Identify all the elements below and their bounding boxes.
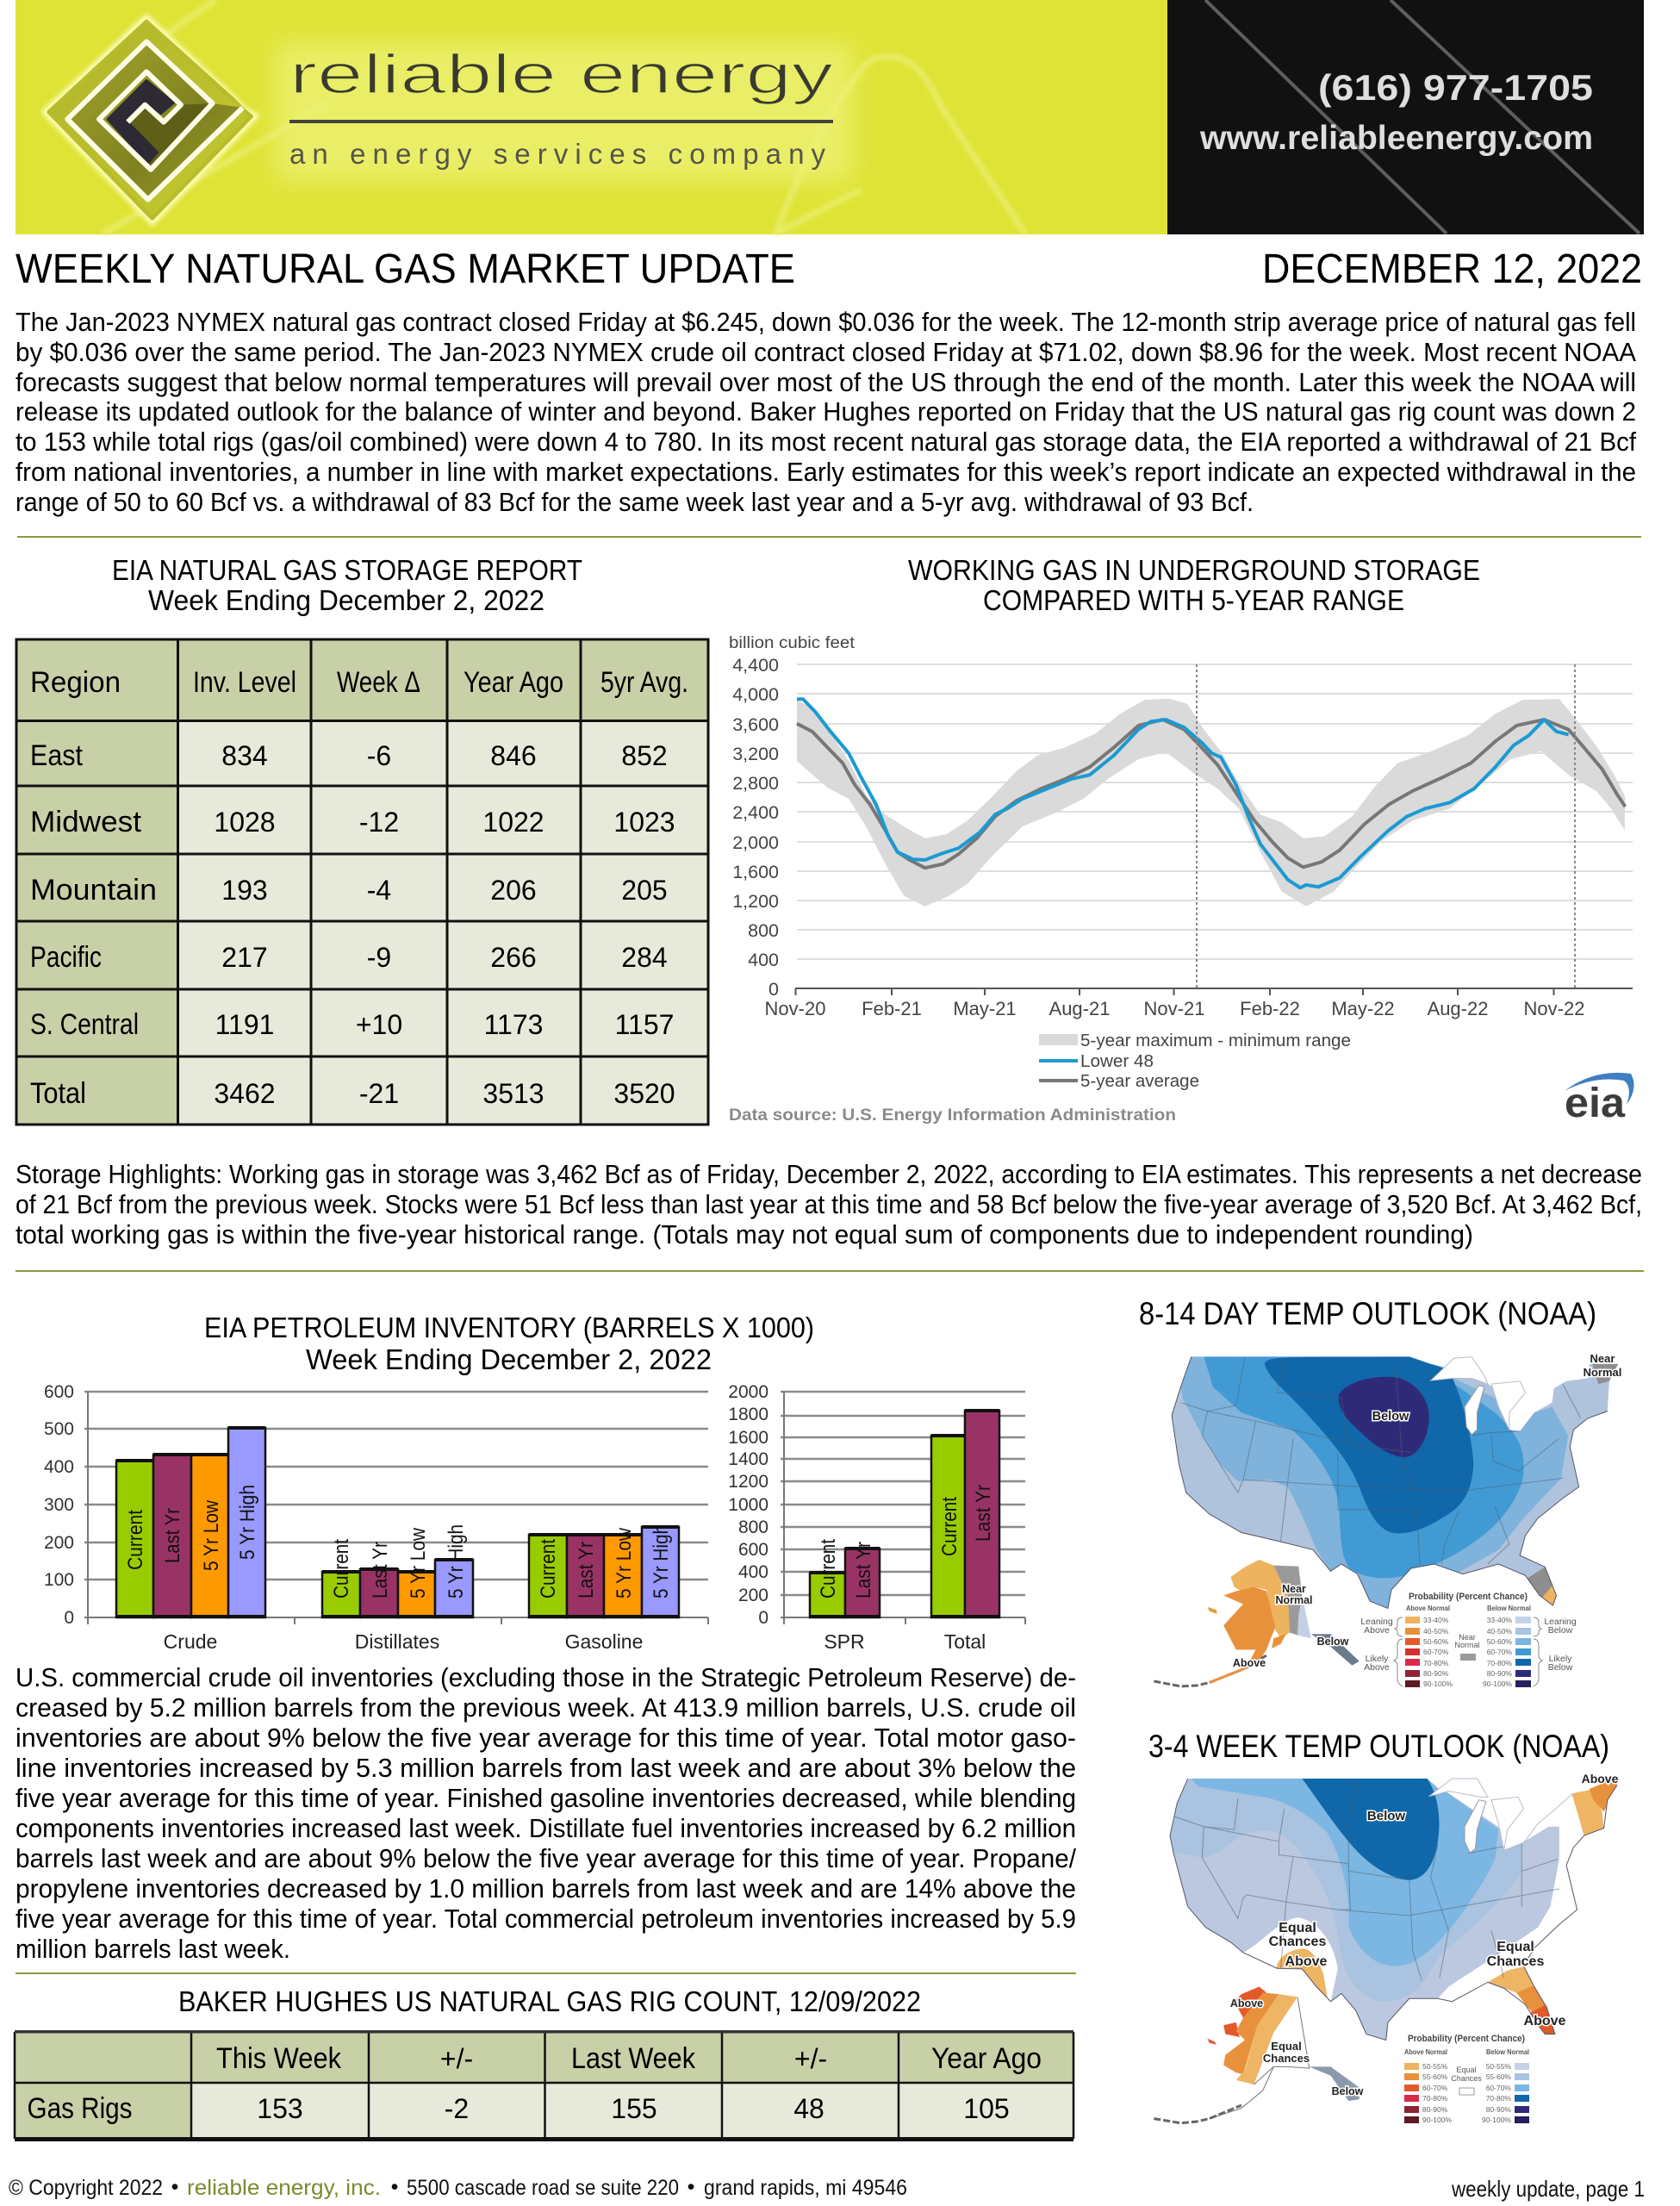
bar chart: crude, distillates, gasoline: 100 <box>44 1570 74 1590</box>
probability legend: Below <box>1548 1625 1573 1636</box>
footer: copyright and address: reliable energy, inc. <box>187 2176 381 2200</box>
table: natural gas storage by region: 266 <box>490 942 537 973</box>
contact panel: (616) 977-1705 <box>1318 67 1593 108</box>
map labels: Normal <box>1584 1366 1621 1379</box>
US contiguous probability bands <box>1172 1356 1618 1610</box>
table: gas rig count: +/- <box>440 2043 473 2074</box>
bar chart: crude, distillates, gasoline: 5 Yr High <box>445 1524 468 1598</box>
market summary paragraph: by $0.036 over the same period. The Jan-2023 NYMEX crude oil contract closed Friday at $71.02, down $8.96 for the week. Most recent NOAA <box>16 338 1637 367</box>
bar chart: crude, distillates, gasoline: Last Yr <box>161 1508 184 1563</box>
table: natural gas storage by region: Midwest <box>30 806 142 838</box>
line chart: working gas in underground storage: 1,200 <box>732 891 779 912</box>
bar chart: SPR and total: 1800 <box>728 1405 768 1424</box>
line chart: working gas in underground storage: 4,000 <box>732 684 779 705</box>
market summary paragraph: from national inventories, a number in line with market expectations. Early estimates for this week’s report indicate an expected withdrawal in the <box>16 458 1636 487</box>
probability legend: Above <box>1364 1625 1390 1636</box>
map labels: Below <box>1372 1410 1409 1424</box>
map labels: Normal <box>1275 1594 1313 1606</box>
line chart: working gas in underground storage: 2,800 <box>732 773 779 794</box>
bar chart: crude, distillates, gasoline: 5 Yr High <box>236 1485 259 1560</box>
bar chart: SPR and total: 1000 <box>728 1495 768 1515</box>
probability legend: 80-90% <box>1423 1669 1449 1678</box>
probability legend: 60-70% <box>1487 1648 1512 1656</box>
line chart: working gas in underground storage: 400 <box>748 950 779 970</box>
page date: DECEMBER 12, 2022 <box>1262 246 1642 292</box>
storage highlights text: total working gas is within the five-year historical range. (Totals may not equal sum of components due to independent rounding) <box>16 1220 1473 1249</box>
line chart: working gas in underground storage: 800 <box>748 920 779 941</box>
line chart: working gas in underground storage: 1,600 <box>732 862 779 882</box>
probability legend: 90-100% <box>1422 2116 1452 2124</box>
bar chart: SPR and total: 200 <box>738 1586 768 1605</box>
line chart: working gas in underground storage: Feb-22 <box>1240 998 1300 1019</box>
bar chart: SPR and total: 400 <box>738 1562 768 1582</box>
banner background <box>16 0 1167 234</box>
map labels: Below <box>1317 1636 1349 1648</box>
bar chart: SPR and total: 600 <box>738 1540 768 1560</box>
Alaska inset <box>1154 1987 1360 2123</box>
line chart: working gas in underground storage: Aug-22 <box>1428 998 1488 1019</box>
probability legend: 80-90% <box>1422 2105 1448 2114</box>
probability legend: 70-80% <box>1423 1659 1449 1667</box>
bar chart: SPR and total: Current <box>817 1539 840 1598</box>
heading: 8-14 day outlook: 8-14 DAY TEMP OUTLOOK (NOAA) <box>1139 1296 1596 1331</box>
contact panel: www.reliableenergy.com <box>1199 120 1593 157</box>
bar chart: SPR and total: 0 <box>758 1608 768 1628</box>
probability legend: Leaning <box>1544 1617 1577 1627</box>
table: gas rig count: -2 <box>445 2093 469 2124</box>
table: natural gas storage by region: Total <box>30 1077 86 1110</box>
heading: petroleum inventory <box>204 1312 814 1375</box>
probability legend: 40-50% <box>1423 1627 1449 1636</box>
table: natural gas storage by region: 217 <box>221 942 268 973</box>
probability legend: Above Normal <box>1404 2047 1447 2056</box>
bar chart: crude, distillates, gasoline: 5 Yr Low <box>613 1527 636 1598</box>
heading: working gas chart: WORKING GAS IN UNDERGROUND STORAGE <box>908 554 1480 586</box>
market summary paragraph <box>16 308 1637 517</box>
map labels: Equal <box>1496 1940 1534 1954</box>
probability legend: Below <box>1548 1662 1573 1673</box>
bar chart: SPR and total: 2000 <box>728 1382 768 1402</box>
table: natural gas storage by region: 193 <box>221 875 268 906</box>
table: natural gas storage by region: Inv. Level <box>193 666 296 699</box>
table: natural gas storage by region: S. Central <box>30 1008 139 1041</box>
bar chart: crude, distillates, gasoline: 5 Yr Low <box>407 1527 430 1598</box>
page title: WEEKLY NATURAL GAS MARKET UPDATE <box>16 246 795 292</box>
map labels: Above <box>1230 1997 1263 2010</box>
petroleum commentary text: line inventories increased by 5.3 million barrels from last week and are about 3% below the <box>16 1754 1076 1783</box>
probability legend: Equal <box>1456 2066 1477 2074</box>
table: natural gas storage by region: Week Δ <box>337 666 420 699</box>
bar chart: crude, distillates, gasoline: Crude <box>164 1630 217 1653</box>
probability legend: 80-90% <box>1486 2105 1511 2114</box>
table: natural gas storage by region: 1023 <box>613 807 675 838</box>
footer: copyright and address: © Copyright 2022 <box>9 2176 163 2200</box>
petroleum commentary text: creased by 5.2 million barrels from the previous week. At 413.9 million barrels, U.S. crude oil <box>16 1693 1076 1723</box>
line chart: working gas in underground storage: Feb-21 <box>862 998 922 1019</box>
line chart: working gas in underground storage: May-21 <box>953 998 1017 1019</box>
probability legend: 55-60% <box>1486 2072 1511 2081</box>
table: gas rig count: 155 <box>611 2093 657 2124</box>
bar chart: crude, distillates, gasoline: Current <box>124 1510 147 1570</box>
map labels: Below <box>1367 1809 1405 1823</box>
table: gas rig count <box>15 2030 1073 2141</box>
bar chart: crude, distillates, gasoline: Last Yr <box>369 1542 392 1598</box>
company name: reliable energy <box>289 43 833 105</box>
table: gas rig count: This Week <box>216 2042 342 2075</box>
line chart: working gas in underground storage: 3,200 <box>732 744 779 764</box>
table: natural gas storage by region: -9 <box>367 942 391 973</box>
footer: copyright and address: 5500 cascade road se suite 220 <box>407 2176 679 2200</box>
5-year range band and curves <box>797 699 1625 907</box>
probability legend: Below Normal <box>1487 1604 1531 1612</box>
table: natural gas storage by region: 1173 <box>484 1009 543 1040</box>
probability legend: Near <box>1459 1633 1476 1642</box>
bar chart: SPR and total: 800 <box>738 1517 768 1537</box>
table: natural gas storage by region: 1191 <box>215 1009 274 1040</box>
heading: working gas chart: COMPARED WITH 5-YEAR RANGE <box>983 584 1404 616</box>
market summary paragraph: release its updated outlook for the balance of winter and beyond. Baker Hughes reported on Friday that the US natural gas rig count was down 2 <box>16 397 1636 427</box>
line chart: working gas in underground storage: Nov-20 <box>765 998 825 1019</box>
bar chart: SPR and total: Total <box>944 1630 986 1653</box>
probability legend: Below Normal <box>1486 2047 1529 2056</box>
map labels: Chances <box>1263 2052 1310 2065</box>
table: natural gas storage by region: 5yr Avg. <box>600 666 688 699</box>
table: natural gas storage by region: 3462 <box>214 1078 276 1109</box>
bar chart: SPR and total: Last Yr <box>852 1542 875 1598</box>
petroleum commentary text: inventories are about 9% below the five year average for this time of year. Total motor gaso- <box>16 1723 1076 1753</box>
table: natural gas storage by region: 1157 <box>615 1009 674 1040</box>
line chart: working gas in underground storage: billion cubic feet <box>729 634 856 652</box>
chart legend: Lower 48 <box>1080 1052 1154 1071</box>
table: natural gas storage by region: 3520 <box>613 1078 675 1109</box>
line chart: working gas in underground storage <box>729 634 1634 1126</box>
probability legend: 33-40% <box>1487 1616 1512 1624</box>
tagline: an energy services company <box>289 138 825 170</box>
probability legend: 90-100% <box>1482 2116 1511 2124</box>
table: natural gas storage by region: -4 <box>367 875 391 906</box>
contact panel <box>1167 0 1644 234</box>
probability legend: Chances <box>1451 2074 1482 2083</box>
table: gas rig count: +/- <box>794 2043 827 2074</box>
table: natural gas storage by region: East <box>30 739 83 772</box>
probability legend: 90-100% <box>1423 1679 1453 1688</box>
footer: copyright and address: • <box>171 2175 178 2199</box>
probability legend: 70-80% <box>1422 2094 1448 2103</box>
table: gas rig count: 153 <box>257 2093 303 2124</box>
map: 3-4 week temperature outlook <box>1154 1770 1638 2124</box>
bar chart: crude, distillates, gasoline: 600 <box>44 1382 74 1402</box>
heading: EIA storage report: Week Ending December 2, 2022 <box>148 584 544 616</box>
chart legend <box>1039 1031 1351 1091</box>
heading: 3-4 week outlook: 3-4 WEEK TEMP OUTLOOK (NOAA) <box>1148 1729 1609 1764</box>
Alaska inset <box>1154 1560 1360 1686</box>
bar chart: crude, distillates, gasoline: 0 <box>64 1608 74 1628</box>
market summary paragraph: forecasts suggest that below normal temperatures will prevail over most of the US through the end of the month. Later this week the NOAA will <box>16 368 1636 397</box>
bar chart: crude, distillates, gasoline <box>44 1382 708 1653</box>
probability legend: 50-55% <box>1486 2062 1511 2071</box>
line chart: working gas in underground storage: Nov-22 <box>1524 998 1584 1019</box>
map labels <box>1233 1352 1621 1669</box>
probability legend: 90-100% <box>1483 1679 1512 1688</box>
probability legend: 50-60% <box>1423 1637 1449 1646</box>
petroleum commentary text: barrels last week and are about 9% below the five year average for this time of year. Propane/ <box>16 1844 1077 1873</box>
table: natural gas storage by region: 3513 <box>482 1078 544 1109</box>
probability legend <box>1404 2034 1529 2124</box>
probability legend: Above Normal <box>1406 1604 1450 1612</box>
table: gas rig count: Year Ago <box>931 2042 1042 2075</box>
probability legend: Above <box>1364 1662 1390 1673</box>
table: natural gas storage by region: -12 <box>359 807 399 838</box>
table: natural gas storage by region: 1028 <box>214 807 276 838</box>
probability legend: 60-70% <box>1486 2084 1511 2092</box>
map labels: Chances <box>1269 1935 1326 1949</box>
icon: eia logo: eia <box>1565 1081 1625 1126</box>
petroleum commentary text <box>16 1663 1077 1964</box>
probability legend: 40-50% <box>1487 1627 1512 1636</box>
map labels: Above <box>1285 1954 1328 1969</box>
bar chart: SPR and total: 1400 <box>728 1449 768 1469</box>
table: natural gas storage by region: Mountain <box>30 874 157 907</box>
market summary paragraph: to 153 while total rigs (gas/oil combined) were down 4 to 780. In its most recent natural gas storage data, the EIA reported a withdrawal of 21 Bcf <box>16 427 1636 457</box>
table: natural gas storage by region: 834 <box>221 740 268 771</box>
icon: reliable energy diamond logo <box>46 19 254 221</box>
bar chart: crude, distillates, gasoline: Current <box>537 1539 560 1598</box>
table: natural gas storage by region: Year Ago <box>464 666 563 699</box>
table: gas rig count: 48 <box>793 2093 824 2124</box>
line chart: working gas in underground storage: 3,600 <box>732 714 779 735</box>
probability legend: 70-80% <box>1486 2094 1511 2103</box>
footer: copyright and address: • <box>391 2175 398 2199</box>
probability legend: Likely <box>1549 1654 1572 1664</box>
bar chart: SPR and total: Last Yr <box>972 1485 995 1542</box>
line chart: working gas in underground storage: Aug-21 <box>1049 998 1110 1019</box>
footer: copyright and address: grand rapids, mi 49546 <box>704 2176 907 2200</box>
map labels: Near <box>1282 1583 1306 1595</box>
heading: EIA storage report: EIA NATURAL GAS STORAGE REPORT <box>112 554 582 586</box>
map labels: Above <box>1233 1657 1266 1669</box>
petroleum commentary text: five year average for this time of year. Total commercial petroleum inventories increased by 5.9 <box>16 1904 1076 1934</box>
line chart: working gas in underground storage: 2,400 <box>732 802 779 823</box>
footer: copyright and address: • <box>688 2175 694 2199</box>
probability legend: 80-90% <box>1487 1669 1512 1678</box>
petroleum commentary text: components inventories increased last week. Distillate fuel inventories increased by 6.2 million <box>16 1814 1076 1843</box>
probability legend: 50-55% <box>1422 2062 1448 2071</box>
table: natural gas storage by region: 846 <box>490 740 537 771</box>
map labels: Below <box>1332 2085 1364 2097</box>
line chart: working gas in underground storage: 0 <box>768 979 779 1000</box>
heading: rig count: BAKER HUGHES US NATURAL GAS RIG COUNT, 12/09/2022 <box>178 1985 921 2017</box>
map labels: Equal <box>1279 1921 1316 1935</box>
bar chart: crude, distillates, gasoline: 500 <box>44 1419 74 1439</box>
probability legend: Likely <box>1366 1654 1389 1664</box>
table: natural gas storage by region: 1022 <box>482 807 544 838</box>
probability legend: 60-70% <box>1423 1648 1449 1656</box>
petroleum commentary text: propylene inventories decreased by 1.0 million barrels from last week and are 14% above the <box>16 1874 1076 1904</box>
bar chart: crude, distillates, gasoline: 5 Yr High <box>650 1524 673 1598</box>
table: natural gas storage by region <box>16 639 708 1125</box>
map labels: Near <box>1590 1352 1615 1365</box>
table: natural gas storage by region: 205 <box>621 875 668 906</box>
table: gas rig count: Gas Rigs <box>28 2092 133 2125</box>
probability legend: 60-70% <box>1422 2084 1448 2092</box>
storage highlights text <box>16 1160 1642 1249</box>
table: natural gas storage by region: 206 <box>490 875 537 906</box>
bar chart: crude, distillates, gasoline: Distillates <box>355 1630 439 1653</box>
bar chart: SPR and total: 1200 <box>728 1472 768 1492</box>
bar chart: crude, distillates, gasoline: Gasoline <box>565 1630 643 1653</box>
probability legend: 50-60% <box>1487 1637 1512 1646</box>
bar chart: SPR and total: SPR <box>824 1630 865 1653</box>
heading: EIA storage report <box>112 554 582 616</box>
table: natural gas storage by region: Pacific <box>30 941 102 974</box>
table: natural gas storage by region: Region <box>30 666 121 699</box>
bar chart: SPR and total: Current <box>938 1497 961 1556</box>
table: gas rig count: 105 <box>963 2093 1010 2124</box>
chart legend: 5-year average <box>1080 1072 1199 1091</box>
probability legend <box>1360 1592 1577 1688</box>
probability legend: 33-40% <box>1423 1616 1449 1624</box>
line chart: working gas in underground storage: 4,400 <box>732 655 779 676</box>
banner: reliable energy header <box>16 0 1644 234</box>
probability legend: Probability (Percent Chance) <box>1408 2034 1525 2044</box>
table: natural gas storage by region: 852 <box>621 740 668 771</box>
petroleum commentary text: five year average for this time of year. Finished gasoline inventories decreased, while blending <box>16 1784 1076 1813</box>
bar chart: SPR and total: 1600 <box>728 1428 768 1448</box>
map labels: Above <box>1524 2014 1566 2028</box>
table: natural gas storage by region: -21 <box>359 1078 399 1109</box>
market summary paragraph: range of 50 to 60 Bcf vs. a withdrawal of 83 Bcf for the same week last year and a 5-yr avg. withdrawal of 93 Bcf. <box>16 488 1254 517</box>
market summary paragraph: The Jan-2023 NYMEX natural gas contract closed Friday at $6.245, down $0.036 for the week. The 12-month strip average price of natural gas fell <box>16 308 1636 337</box>
map labels: Equal <box>1271 2040 1302 2053</box>
bar chart: crude, distillates, gasoline: 300 <box>44 1495 74 1515</box>
heading: petroleum inventory: EIA PETROLEUM INVENTORY (BARRELS X 1000) <box>204 1312 814 1343</box>
line chart: working gas in underground storage: 2,000 <box>732 832 779 853</box>
probability legend: Leaning <box>1360 1617 1393 1627</box>
bar chart: crude, distillates, gasoline: 400 <box>44 1457 74 1477</box>
petroleum commentary text: U.S. commercial crude oil inventories (excluding those in the Strategic Petroleum Reserve) de- <box>16 1663 1076 1692</box>
line chart: working gas in underground storage: May-22 <box>1331 998 1395 1019</box>
data source note: Data source: U.S. Energy Information Administration <box>729 1106 1176 1125</box>
probability legend: 70-80% <box>1487 1659 1512 1667</box>
heading: working gas chart <box>908 554 1480 616</box>
table: gas rig count: Last Week <box>571 2042 696 2075</box>
bar chart: SPR and total <box>728 1382 1025 1653</box>
map labels: Above <box>1582 1772 1619 1785</box>
probability legend: Normal <box>1454 1641 1480 1649</box>
line chart: working gas in underground storage: Nov-21 <box>1144 998 1204 1019</box>
bar chart: crude, distillates, gasoline: 5 Yr Low <box>200 1499 223 1571</box>
heading: petroleum inventory: Week Ending December 2, 2022 <box>306 1343 712 1375</box>
petroleum commentary text: million barrels last week. <box>16 1935 290 1964</box>
footer: page number: weekly update, page 1 <box>1451 2176 1645 2202</box>
bar chart: crude, distillates, gasoline: Last Yr <box>575 1542 598 1598</box>
table: natural gas storage by region: 284 <box>621 942 668 973</box>
bar chart: crude, distillates, gasoline: Current <box>330 1539 353 1598</box>
US contiguous probability bands <box>1170 1779 1618 2041</box>
map labels <box>1230 1772 1619 2097</box>
table: natural gas storage by region: +10 <box>356 1009 402 1040</box>
chart legend: 5-year maximum - minimum range <box>1080 1031 1351 1050</box>
footer: copyright and address <box>9 2175 907 2200</box>
probability legend: Probability (Percent Chance) <box>1409 1592 1528 1602</box>
map labels: Chances <box>1487 1954 1544 1969</box>
table: natural gas storage by region: -6 <box>367 740 391 771</box>
bar chart: crude, distillates, gasoline: 200 <box>44 1533 74 1553</box>
map: 8-14 day temperature outlook <box>1154 1349 1638 1688</box>
probability legend: 55-60% <box>1422 2072 1448 2081</box>
